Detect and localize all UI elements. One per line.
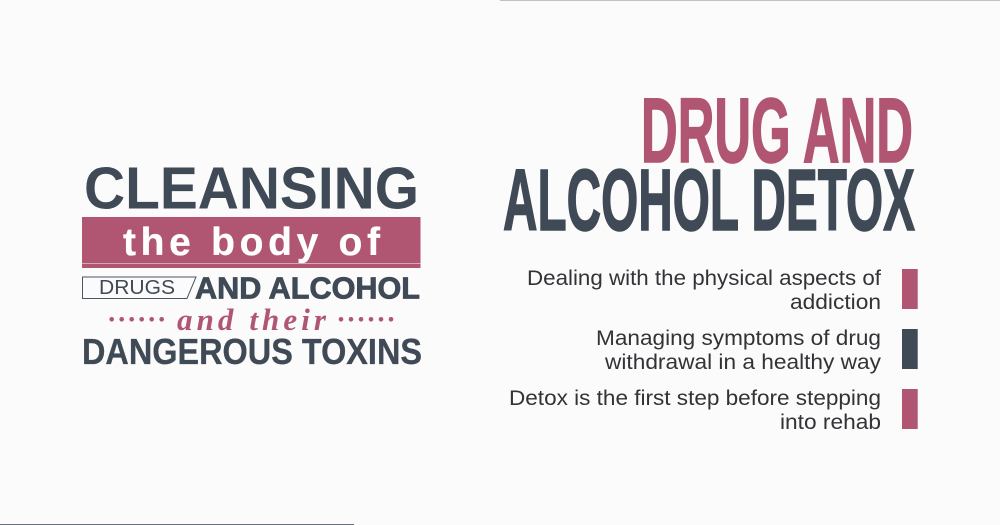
list item: first step: into rehab bbox=[780, 411, 881, 434]
list item: withdrawal symptoms: Managing symptoms of drug bbox=[596, 327, 881, 350]
heading: dangerous toxins: DANGEROUS TOXINS bbox=[82, 331, 422, 372]
marker: dark bar bbox=[902, 329, 918, 369]
list item: physical aspects: addiction bbox=[790, 291, 881, 314]
marker: pink bar 1 bbox=[902, 269, 918, 309]
marker: pink bar 2 bbox=[902, 389, 918, 429]
heading: cleansing: CLEANSING bbox=[84, 156, 419, 222]
banner: the body of: the body of bbox=[123, 221, 381, 264]
title: drug and alcohol detox bbox=[503, 80, 915, 249]
panel: cleansing typographic lockup bbox=[82, 156, 422, 372]
list item: physical aspects bbox=[527, 267, 918, 314]
heading: and alcohol: AND ALCOHOL bbox=[195, 272, 420, 306]
dotted ornament right bbox=[339, 317, 393, 322]
list item: withdrawal symptoms bbox=[596, 327, 918, 374]
label box: drugs: DRUGS bbox=[99, 277, 175, 299]
script text: and their: and their bbox=[177, 302, 327, 337]
list item: first step: Detox is the first step before stepping bbox=[509, 387, 881, 410]
list item: first step bbox=[509, 387, 918, 434]
dotted ornament left bbox=[109, 317, 164, 322]
list item: withdrawal symptoms: withdrawal in a healthy way bbox=[604, 351, 882, 374]
list item: physical aspects: Dealing with the physical aspects of bbox=[527, 267, 881, 290]
label box: drugs bbox=[82, 277, 196, 299]
banner: the body of bbox=[82, 217, 420, 268]
